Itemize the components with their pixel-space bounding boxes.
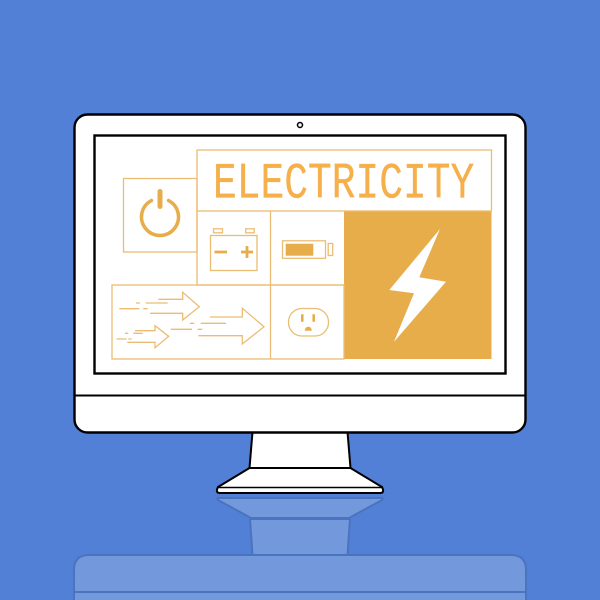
screen bbox=[94, 136, 506, 374]
panel: amber lightning tile bbox=[344, 211, 492, 359]
monitor reflection bbox=[74, 498, 526, 600]
icon: charge level battery bbox=[282, 241, 333, 258]
monitor stand bbox=[217, 432, 383, 493]
camera bbox=[298, 122, 302, 128]
panel grid lines bbox=[112, 150, 492, 359]
icon: wall outlet bbox=[288, 308, 328, 336]
icon: lightning bolt bbox=[389, 229, 446, 342]
icon: moving arrows bbox=[117, 292, 264, 348]
monitor body bbox=[74, 114, 526, 432]
screen content: electricity panel bbox=[112, 150, 492, 359]
heading: ELECTRICITY bbox=[213, 155, 474, 213]
icon: car battery bbox=[210, 229, 257, 270]
icon: power button bbox=[142, 192, 179, 235]
chin divider bbox=[74, 394, 526, 396]
